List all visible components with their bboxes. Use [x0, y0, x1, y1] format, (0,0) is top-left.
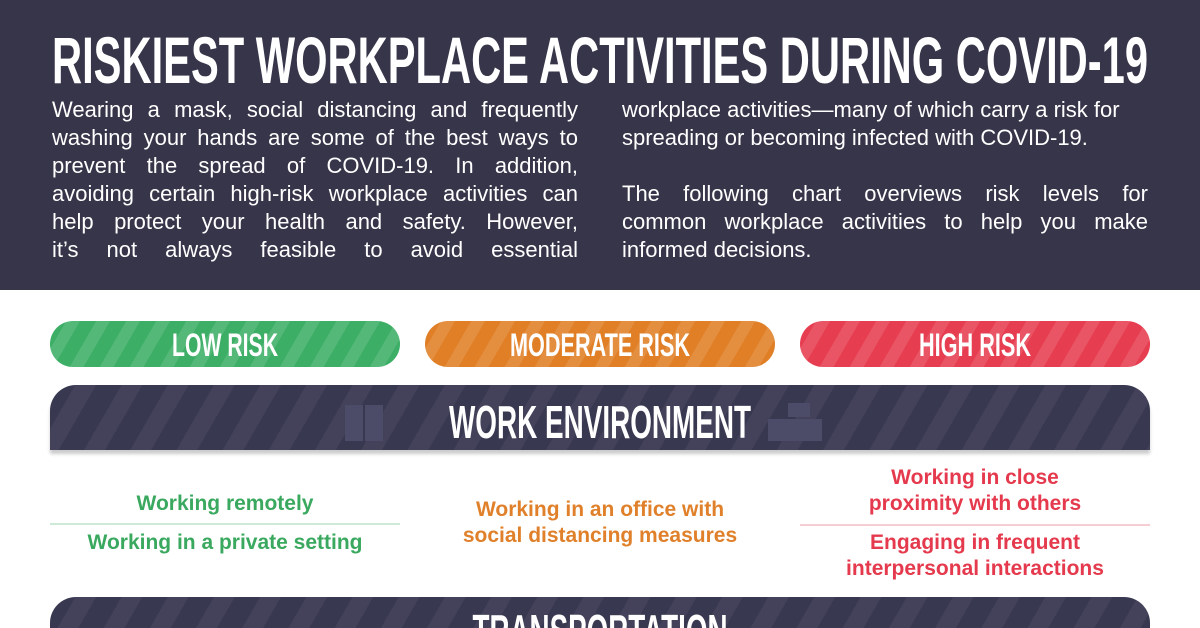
moderate item: social distancing measures [463, 524, 737, 547]
intro text right: informed decisions. [622, 237, 812, 262]
text: Working in a private setting [88, 531, 362, 554]
pill: moderate risk [425, 321, 775, 367]
pill: high risk [800, 321, 1150, 367]
intro text left: prevent the spread of COVID-19. In addition, [52, 153, 578, 178]
intro text left: Wearing a mask, social distancing and frequently [52, 97, 578, 122]
moderate item [463, 498, 737, 547]
intro text right [622, 97, 1148, 262]
pill: low risk [50, 321, 400, 367]
pill: moderate risk: MODERATE RISK [510, 327, 690, 363]
low risk items: Working remotely [136, 492, 313, 515]
intro text left [52, 97, 578, 262]
intro text right: The following chart overviews risk levels for [622, 181, 1148, 206]
pill: high risk: HIGH RISK [919, 327, 1031, 363]
intro text left: it’s not always feasible to avoid essential [52, 237, 578, 262]
high risk items: proximity with others [869, 492, 1081, 515]
intro text right: common workplace activities to help you make [622, 209, 1148, 234]
intro text right: spreading or becoming infected with COVID-19. [622, 125, 1088, 150]
intro text right: workplace activities—many of which carry a risk for [622, 97, 1120, 122]
section bar: work environment [50, 385, 1150, 450]
high risk items [869, 466, 1081, 515]
text: interpersonal interactions [846, 557, 1104, 580]
intro text left: washing your hands are some of the best ways to [52, 125, 578, 150]
section bar: transportation [50, 597, 1150, 628]
pill: low risk: LOW RISK [172, 327, 278, 363]
intro text left: avoiding certain high-risk workplace activities can [52, 181, 578, 206]
high risk items: Working in close [891, 466, 1059, 489]
section bar: work environment: WORK ENVIRONMENT [449, 396, 751, 448]
text: Engaging in frequent [870, 531, 1080, 554]
intro text left: help protect your health and safety. However, [52, 209, 578, 234]
moderate item: Working in an office with [476, 498, 724, 521]
header panel [0, 0, 1200, 290]
